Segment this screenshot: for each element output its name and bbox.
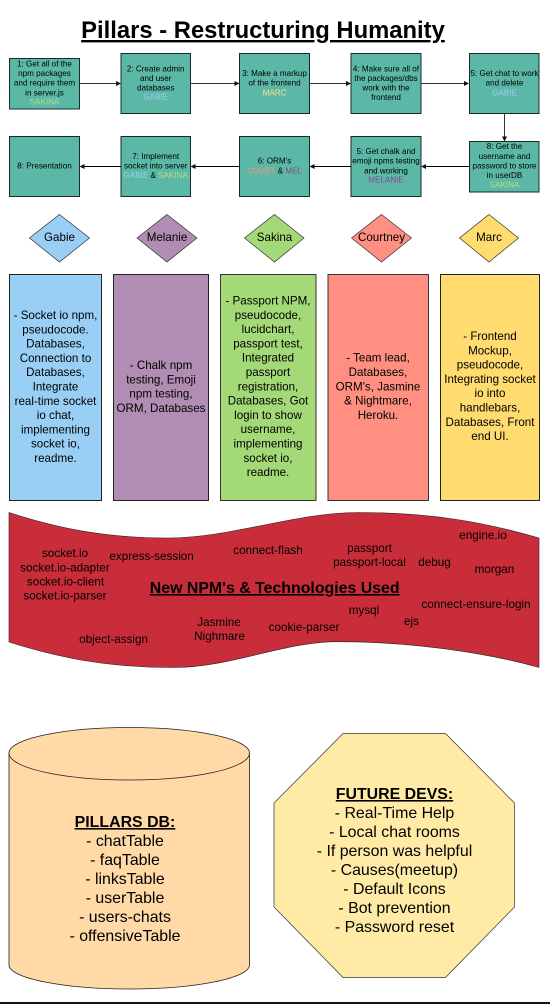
flow step 4	[351, 54, 421, 114]
arrow: step 3 to 4	[310, 81, 351, 86]
panel: Sakina tasks: socket io,	[244, 452, 292, 465]
panel: Sakina tasks: passport	[246, 366, 291, 379]
other packages: debug	[418, 556, 451, 569]
diamond: Sakina	[244, 214, 304, 262]
DB table list: - userTable	[86, 890, 164, 907]
flow step: ORMs	[240, 136, 310, 196]
flow step 2: GABIE	[143, 93, 169, 102]
panel: Sakina tasks: lucidchart,	[242, 323, 294, 336]
arrow: step 1 to 2	[80, 81, 121, 86]
other packages: passport-local	[333, 556, 406, 569]
other packages: ejs	[404, 615, 419, 628]
other packages: morgan	[475, 563, 514, 576]
future devs heading: FUTURE DEVS:	[336, 786, 453, 803]
panel: Marc tasks: pseudocode,	[457, 359, 523, 372]
flow step 3: of the frontend	[248, 79, 301, 88]
future devs list: - Local chat rooms	[329, 824, 460, 841]
panel: Melanie tasks: ORM, Databases	[117, 402, 206, 415]
diamond: Melanie	[137, 214, 197, 262]
arrow: step 2 to 3	[190, 81, 240, 86]
future devs list	[317, 805, 472, 936]
flow step 5: 5: Get chat to work	[471, 69, 539, 78]
panel: Sakina tasks: Integrated	[242, 352, 294, 365]
diamond: Sakina: Sakina	[257, 231, 293, 244]
panel: Gabie tasks: pseudocode.	[22, 323, 89, 336]
future devs list: - Default Icons	[343, 881, 446, 898]
other packages: object-assign	[79, 633, 148, 646]
flow step 3	[240, 54, 310, 114]
panel: Gabie tasks: readme.	[34, 452, 77, 465]
panel: Melanie tasks	[114, 274, 208, 500]
octagon: future devs	[274, 734, 514, 978]
flow step 1: npm packages	[18, 69, 71, 78]
DB heading: PILLARS DB:	[75, 814, 175, 831]
other packages: connect-flash	[233, 544, 303, 557]
flow step 4: the packages/dbs	[354, 74, 418, 83]
panel: Marc tasks: Mockup,	[468, 344, 512, 357]
flow step 5: GABIE	[492, 88, 517, 97]
panel: Marc tasks: Databases, Front	[446, 416, 535, 429]
DB table list	[69, 833, 181, 945]
flow step: ORMs: 6: ORM's	[258, 156, 291, 166]
future devs list: - Real-Time Help	[335, 805, 454, 822]
panel: Sakina tasks: - Passport NPM,	[225, 294, 311, 308]
flow step: implement socket: 7: Implement	[132, 152, 180, 161]
title: Pillars - Restructuring Humanity	[81, 17, 446, 44]
arrow: to socket step	[190, 164, 240, 169]
panel: Gabie tasks: io chat,	[37, 409, 74, 422]
flow step 1: and require them	[14, 79, 75, 88]
socket packages: socket.io	[42, 547, 89, 560]
DB table list: - users-chats	[79, 909, 171, 926]
flow step 1	[10, 58, 80, 109]
flow step 1: SAKINA	[30, 98, 60, 107]
panel: Gabie tasks: Databases,	[26, 338, 85, 351]
flow step 4: 4: Make sure all of	[353, 64, 420, 73]
diamond: Courtney	[352, 214, 412, 262]
arrow: to presentation	[80, 164, 121, 169]
panel: Gabie tasks: socket io,	[31, 438, 80, 451]
future devs list: - Bot prevention	[338, 900, 451, 917]
flow step: username and password: SAKINA	[490, 180, 520, 190]
diamond: Courtney: Courtney	[358, 231, 405, 244]
flow step 4: work with the	[361, 83, 410, 92]
panel: Marc tasks: Integrating socket	[444, 373, 537, 386]
future devs list: - If person was helpful	[317, 843, 472, 860]
other packages: engine.io	[459, 529, 507, 542]
flow step 5: and delete	[486, 79, 524, 88]
flow step: chalk and emoji: 5: Get chalk and	[357, 147, 415, 156]
flow step 5	[470, 54, 539, 114]
panel: Gabie tasks: implementing	[21, 423, 90, 436]
flow step 4: frontend	[371, 93, 401, 102]
future devs list: - Causes(meetup)	[331, 862, 458, 879]
socket packages: socket.io-adapter	[20, 561, 110, 574]
flow step 3: 3: Make a markup	[242, 69, 307, 78]
panel: Sakina tasks: login to show	[234, 409, 302, 422]
panel: Marc tasks: - Frontend	[463, 330, 517, 343]
other packages: cookie-parser	[269, 621, 340, 634]
panel: Marc tasks: end UI.	[471, 430, 509, 443]
flow step: implement socket	[121, 136, 190, 196]
flow step: chalk and emoji	[351, 136, 421, 196]
panel: Courtney tasks	[328, 274, 428, 500]
diamond: Melanie: Melanie	[147, 231, 187, 244]
panel: Gabie tasks	[10, 274, 102, 500]
flow step 1: in server.js	[25, 88, 64, 97]
flow step 2: and user	[140, 74, 172, 83]
panel: Melanie tasks: - Chalk npm	[130, 359, 192, 372]
flow step: chalk and emoji: and working	[364, 166, 408, 175]
banner heading: New NPM's & Technologies Used	[150, 580, 400, 597]
panel: Sakina tasks	[220, 274, 316, 500]
other packages: connect-ensure-login	[421, 598, 531, 611]
other packages: passport	[347, 542, 393, 555]
panel: Gabie tasks: - Socket io npm,	[14, 309, 97, 322]
panel: Gabie tasks: Databases,	[26, 366, 85, 379]
panel: Melanie tasks: testing, Emoji	[126, 373, 196, 386]
panel: Marc tasks: io into	[475, 387, 505, 400]
panel: Gabie tasks: Integrate	[33, 380, 78, 394]
other packages	[79, 529, 531, 646]
panel: Courtney tasks: Heroku.	[358, 409, 398, 422]
panel: Sakina tasks: pseudocode,	[235, 309, 301, 322]
panel: Marc tasks	[440, 274, 540, 500]
panel: Sakina tasks: readme.	[247, 466, 289, 479]
other packages: Nighmare	[194, 630, 245, 643]
arrow: to ORM step	[310, 164, 351, 169]
panel: Melanie tasks: npm testing,	[129, 388, 193, 401]
other packages: mysql	[349, 604, 379, 617]
flow step: presentation	[10, 136, 80, 196]
panel: Marc tasks: handlebars,	[460, 402, 520, 414]
panel: Courtney tasks: Databases,	[349, 366, 407, 379]
panel: Courtney tasks: & Nightmare,	[344, 395, 412, 408]
cylinder: Pillars DB	[9, 728, 250, 989]
flow step: username and password: 8: Get the	[487, 142, 523, 151]
panel: Sakina tasks: username,	[241, 423, 295, 436]
panel: Sakina tasks: implementing	[234, 438, 302, 450]
diamond: Gabie	[30, 214, 90, 262]
diamond: Gabie: Gabie	[44, 231, 75, 244]
panel: Courtney tasks: ORM's, Jasmine	[336, 380, 420, 393]
panel: Sakina tasks: registration,	[238, 380, 298, 393]
flow step: ORMs: COURT & MEL	[247, 166, 303, 175]
flow step: username and password: password to store	[473, 162, 537, 170]
flow step: implement socket: socket into server	[124, 162, 188, 170]
arrow: step 4 to 5	[421, 81, 469, 86]
DB table list: - offensiveTable	[69, 928, 181, 945]
panel: Gabie tasks: real-time socket	[15, 395, 97, 408]
panel: Sakina tasks: passport test,	[233, 337, 303, 350]
DB table list: - chatTable	[86, 833, 164, 850]
panel: Gabie tasks: Connection to	[20, 352, 91, 365]
flow step 2: 2: Create admin	[127, 64, 184, 73]
socket packages: socket.io-parser	[23, 590, 107, 603]
flow step: username and password: username and	[479, 152, 530, 161]
future devs list: - Password reset	[335, 919, 455, 936]
diamond: Marc	[460, 214, 518, 262]
arrow: step 5 down to 6	[502, 114, 507, 142]
flow step: username and password	[470, 142, 539, 192]
panel: Sakina tasks: Databases, Got	[228, 395, 309, 408]
DB table list: - faqTable	[90, 852, 160, 869]
panel: Courtney tasks: - Team lead,	[346, 352, 410, 365]
flow step: chalk and emoji: emoji npms testing	[352, 156, 420, 166]
banner: new NPMs and technologies	[9, 512, 539, 668]
other packages: express-session	[109, 550, 194, 563]
flow step 2: databases	[137, 83, 174, 92]
other packages: Jasmine	[197, 616, 241, 629]
socket packages: socket.io-client	[27, 575, 105, 588]
arrow: to chalk step	[421, 164, 470, 169]
flow step 2	[121, 54, 190, 114]
diamond: Marc: Marc	[476, 231, 502, 244]
flow step: presentation: 8: Presentation	[17, 162, 72, 170]
DB table list: - linksTable	[85, 871, 165, 888]
socket packages	[20, 547, 110, 603]
flow step: implement socket: GABIE & SAKINA	[124, 171, 188, 180]
flow step 3: MARC	[263, 88, 287, 97]
flow step 1: 1: Get all of the	[17, 60, 72, 68]
flow step: chalk and emoji: MELANIE	[368, 176, 404, 185]
flow step: username and password: in userDB	[487, 171, 522, 180]
